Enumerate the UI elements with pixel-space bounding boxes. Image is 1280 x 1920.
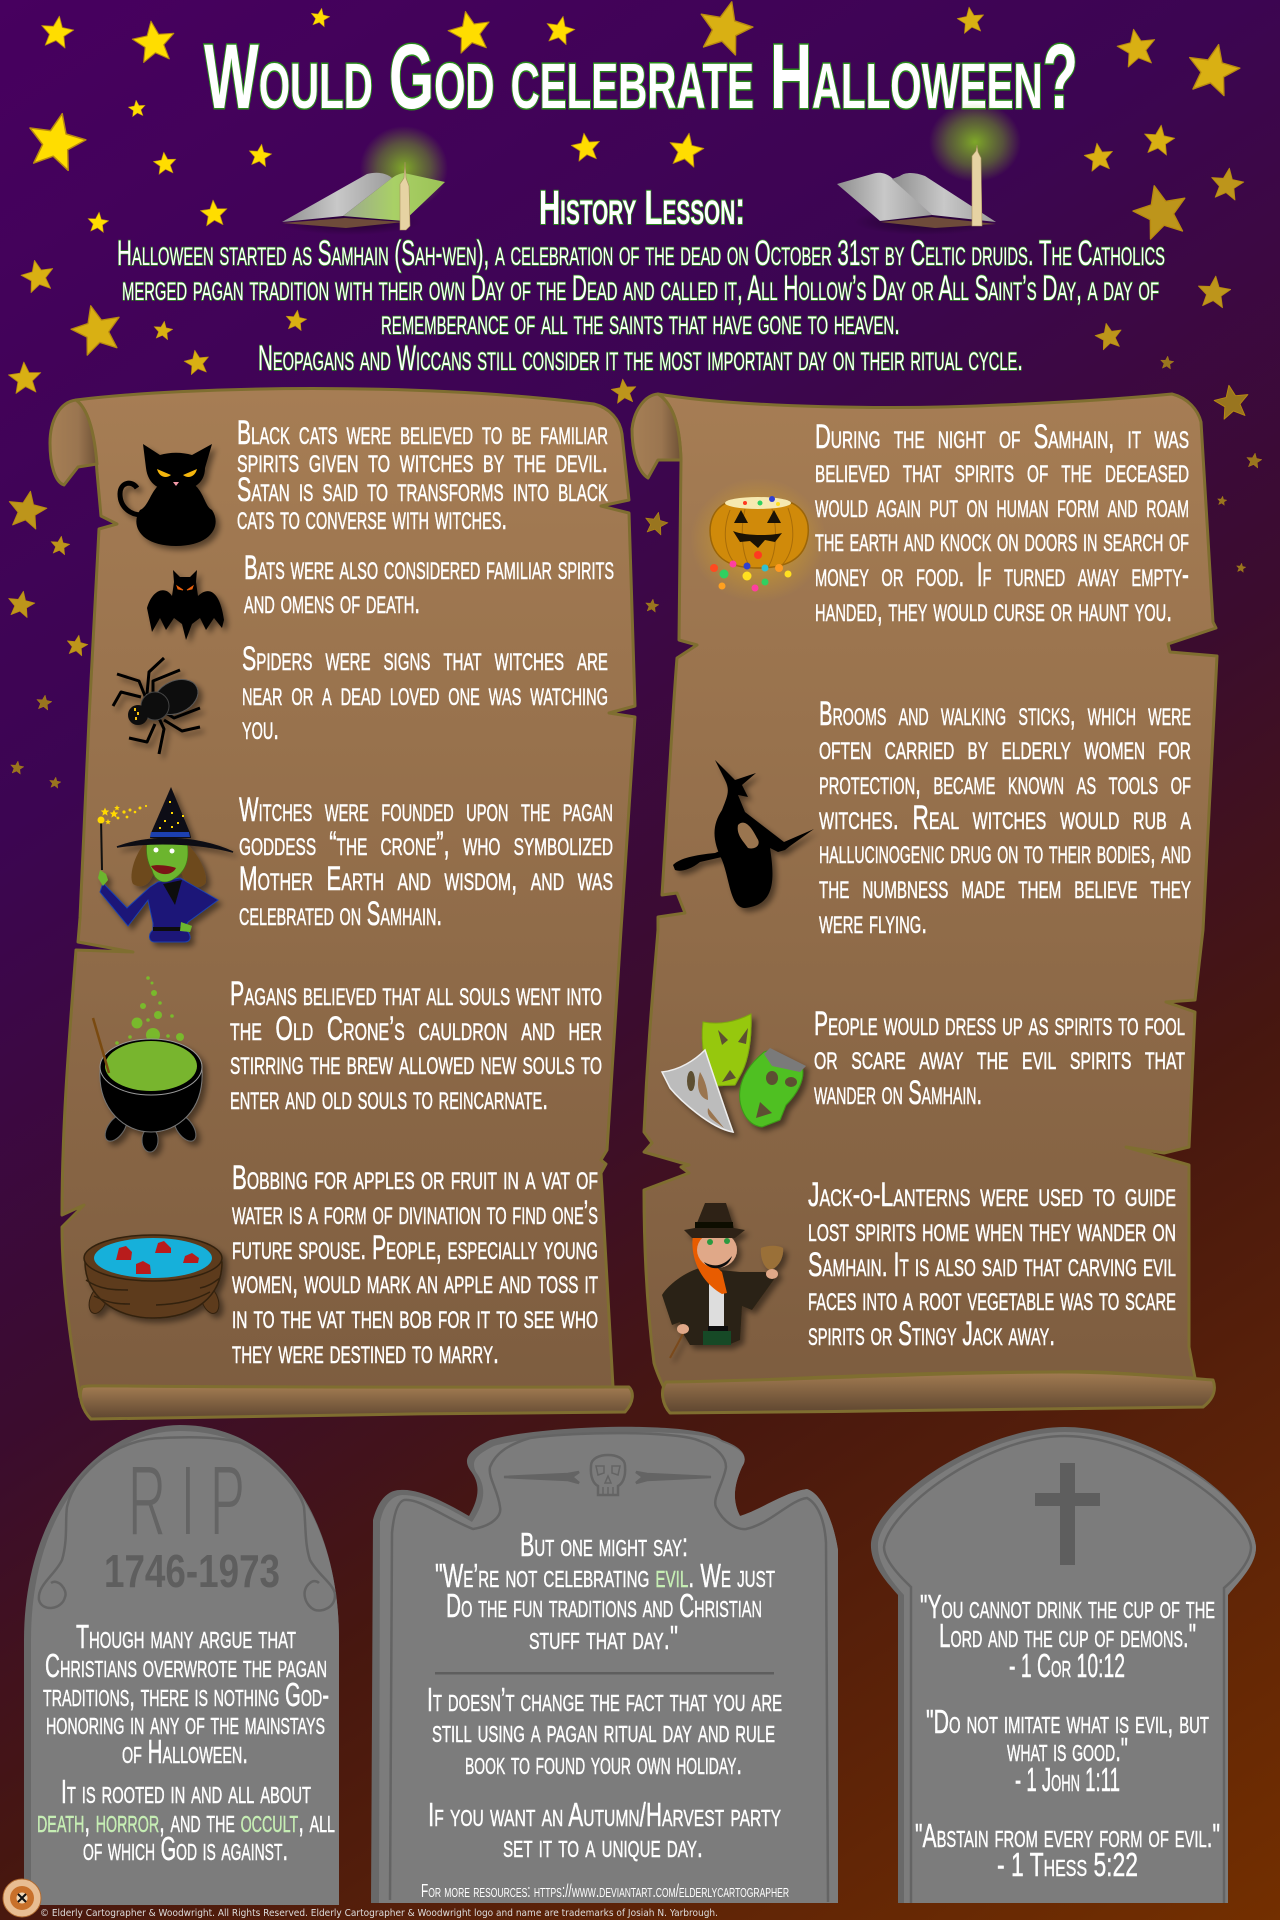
text block: bats: and omens of death. (244, 583, 420, 621)
text block: black cats (237, 414, 608, 537)
panel: right scroll (632, 394, 1217, 1413)
tombstone text: "We’re not celebrating evil. We just (435, 1557, 775, 1594)
text block: bobbing for apples: women, would mark an apple and toss it (232, 1263, 598, 1301)
tombstone text: death, horror, and the occult, all (37, 1802, 335, 1839)
wand and sparkles (98, 805, 147, 870)
text block: witches: goddess “the crone”, who symbolized (239, 825, 613, 863)
bottom roll (663, 1372, 1214, 1413)
bottom roll (80, 1386, 632, 1419)
icon: stingy jack (662, 1203, 783, 1358)
text block: bobbing for apples (232, 1159, 598, 1371)
tombstone text: still using a pagan ritual day and rule (432, 1712, 775, 1749)
engraving: cross (1035, 1463, 1100, 1565)
tombstone text: of which God is against. (83, 1830, 288, 1867)
ornament: swords and skull (504, 1455, 711, 1495)
text block: witches (239, 791, 613, 933)
tombstone text: book to found your own holiday. (465, 1744, 742, 1781)
dress (100, 878, 218, 942)
panel: middle tombstone (371, 1427, 838, 1903)
tombstone text: Christians overwrote the pagan (45, 1647, 327, 1684)
tombstone text: what is good." (1007, 1731, 1128, 1768)
engraved border (39, 1437, 335, 1610)
icon: open book with candle, left (278, 126, 448, 235)
divider (435, 1672, 774, 1674)
text block: pagans: stirring the brew allowed new souls to (230, 1044, 602, 1082)
top curl (632, 394, 681, 478)
tombstone text: If you want an Autumn/Harvest party (428, 1796, 781, 1833)
text block: spiders: you. (242, 709, 279, 747)
icon: spider (113, 658, 204, 754)
text block: night of samhain (815, 418, 1189, 629)
face (147, 839, 188, 882)
tombstone text: Do the fun traditions and Christian (446, 1587, 762, 1624)
text block: witches: Mother Earth and wisdom, and was (239, 860, 613, 898)
engraved border (884, 1436, 1251, 1903)
logo: elderly cartographer seal (3, 1879, 41, 1917)
tombstone text (435, 1526, 775, 1656)
tombstone text: But one might say: (520, 1526, 688, 1563)
tombstone text: Though many argue that (76, 1618, 296, 1655)
text block: witches: celebrated on Samhain. (239, 895, 442, 933)
text block: bobbing for apples: they were destined to marry. (232, 1333, 499, 1371)
icon: bat (147, 570, 224, 640)
legs (101, 1111, 200, 1152)
text block: jack-o-lanterns: spirits or Stingy Jack away. (808, 1315, 1055, 1353)
tombstone text: - 1 Cor 10:12 (1009, 1647, 1125, 1684)
tombstone text: It doesn’t change the fact that you are (427, 1681, 782, 1718)
tombstone text (915, 1588, 1220, 1883)
tombstone text (427, 1681, 782, 1864)
text block: black cats: Satan is said to transforms into black (237, 471, 608, 509)
text block: spiders (242, 640, 608, 747)
scroll body (62, 388, 635, 1419)
icon: flying witch silhouette (673, 760, 814, 908)
engraving: dates: 1746-1973 (104, 1545, 280, 1597)
icon: pumpkin with candy (690, 478, 826, 602)
icon: witch (98, 787, 233, 942)
tombstone text: honoring in any of the mainstays (46, 1704, 325, 1741)
icon: black cat (120, 444, 216, 546)
stars (5, 0, 1263, 789)
text block: dress up (814, 1005, 1185, 1112)
text block: pagans: Pagans believed that all souls went into (230, 975, 602, 1013)
tombstone text: - 1 John 1:11 (1015, 1761, 1120, 1798)
candy in rim (725, 496, 791, 509)
tombstone text: stuff that day." (529, 1619, 678, 1656)
text block: black cats: cats to converse with witches. (237, 499, 507, 537)
text block: bobbing for apples: Bobbing for apples or fruit in a vat of (232, 1159, 598, 1197)
text block: bobbing for apples: future spouse. People, especially young (232, 1229, 598, 1267)
engraving: RIP: R I P (128, 1445, 245, 1557)
icon: open book with candle, right (837, 102, 1021, 235)
resources link: For more resources: https://www.deviantart.com/elderlycartographer (421, 1881, 789, 1901)
text block: history lesson: rememberance of all the saints that have gone to heaven. (381, 303, 900, 342)
text block: pagans: enter and old souls to reincarnate. (230, 1079, 548, 1117)
scroll body (644, 394, 1217, 1392)
text block: spiders: Spiders were signs that witches are (242, 640, 608, 678)
text block: black cats: Black cats were believed to be familiar (237, 414, 608, 452)
top curl (50, 400, 97, 485)
text block: history lesson (117, 234, 1165, 378)
footer copyright: © Elderly Cartographer & Woodwright. All Rights Reserved. Elderly Cartographer & Woodwright logo and name are trademarks of Josiah N. Yarbrough. (40, 1908, 718, 1919)
bubbles (115, 976, 184, 1045)
text block: black cats: spirits given to witches by the devil. (237, 442, 608, 480)
heading: history lesson: History Lesson: (539, 182, 745, 235)
hair (131, 840, 206, 887)
text block: bobbing for apples: water is a form of divination to find one’s (232, 1194, 598, 1232)
text block: bats (244, 549, 614, 621)
tombstone text (37, 1618, 335, 1867)
tombstone text: - 1 Thess 5:22 (997, 1846, 1138, 1883)
tombstone text: It is rooted in and all about (61, 1773, 311, 1810)
text block: brooms (819, 695, 1191, 941)
tombstone text: of Halloween. (122, 1733, 248, 1770)
icon: green cauldron (93, 976, 202, 1152)
tombstone text: set it to a unique day. (503, 1827, 703, 1864)
panel: left tombstone (24, 1425, 339, 1905)
text block: brooms: were flying. (819, 903, 927, 941)
text block: jack-o-lanterns (808, 1176, 1176, 1353)
panel: left scroll (50, 388, 635, 1419)
panel: right tombstone (871, 1427, 1256, 1903)
hands (98, 870, 192, 932)
text block: bats: Bats were also considered familiar spirits (244, 549, 614, 587)
text block: witches: Witches were founded upon the pagan (239, 791, 613, 829)
engraved border (390, 1433, 828, 1902)
text block: dress up: wander on Samhain. (814, 1074, 982, 1112)
text block: spiders: near or a dead loved one was watching (242, 675, 608, 713)
text block: pagans: the Old Crone’s cauldron and her (230, 1010, 602, 1048)
icon: apple bobbing vat (84, 1235, 222, 1318)
hat (150, 787, 191, 838)
tombstone text: traditions, there is nothing God- (43, 1676, 329, 1713)
text block: bobbing for apples: in to the vat then bob for it to see who (232, 1298, 598, 1336)
icon: costume masks (662, 1014, 806, 1132)
text block: pagans (230, 975, 602, 1117)
